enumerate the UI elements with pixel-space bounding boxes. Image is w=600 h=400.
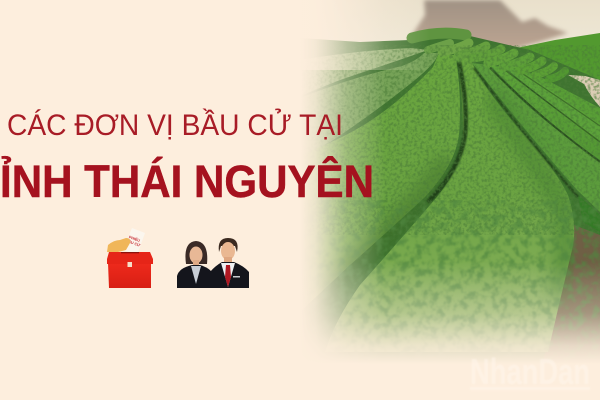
- man: [210, 238, 249, 288]
- woman: [177, 241, 213, 288]
- title line 1: CÁC ĐƠN VỊ BẦU CỬ TẠI: [7, 108, 343, 142]
- mountain: [410, 0, 568, 50]
- left tea rows: [313, 48, 424, 90]
- ballot paper: [123, 228, 145, 255]
- soft fade at left edge: [300, 38, 380, 358]
- dark furrows: [428, 62, 600, 202]
- right tea rows: [522, 72, 600, 126]
- photo: tea hills of Thái Nguyên: [300, 0, 600, 372]
- dirt path: [568, 75, 600, 107]
- base of the tea field: [300, 36, 600, 372]
- central tea row: [325, 57, 574, 352]
- top terraces: [412, 33, 565, 79]
- box lid: [107, 252, 153, 264]
- leaf texture: fine: [300, 45, 600, 235]
- leaf texture: large foreground leaves: [330, 200, 600, 342]
- box body: [108, 263, 151, 288]
- hand: [107, 238, 130, 252]
- lock: [128, 262, 132, 267]
- brown soil: [551, 225, 600, 344]
- distant green hill: [520, 33, 600, 80]
- soft fade at bottom: [300, 262, 600, 364]
- icon: two delegates: [177, 238, 249, 288]
- sky: [352, 0, 600, 44]
- soft fade at top left: [308, 30, 422, 70]
- shadow on right flank of central row: [490, 95, 566, 300]
- ballot paper: BẦU CỬ: [125, 238, 142, 248]
- shadow at foot of left row: [330, 154, 452, 282]
- ballot paper: PHIẾU: [128, 234, 141, 243]
- title line 2: ỈNH THÁI NGUYÊN: [0, 156, 374, 207]
- icon: ballot box: [107, 228, 153, 288]
